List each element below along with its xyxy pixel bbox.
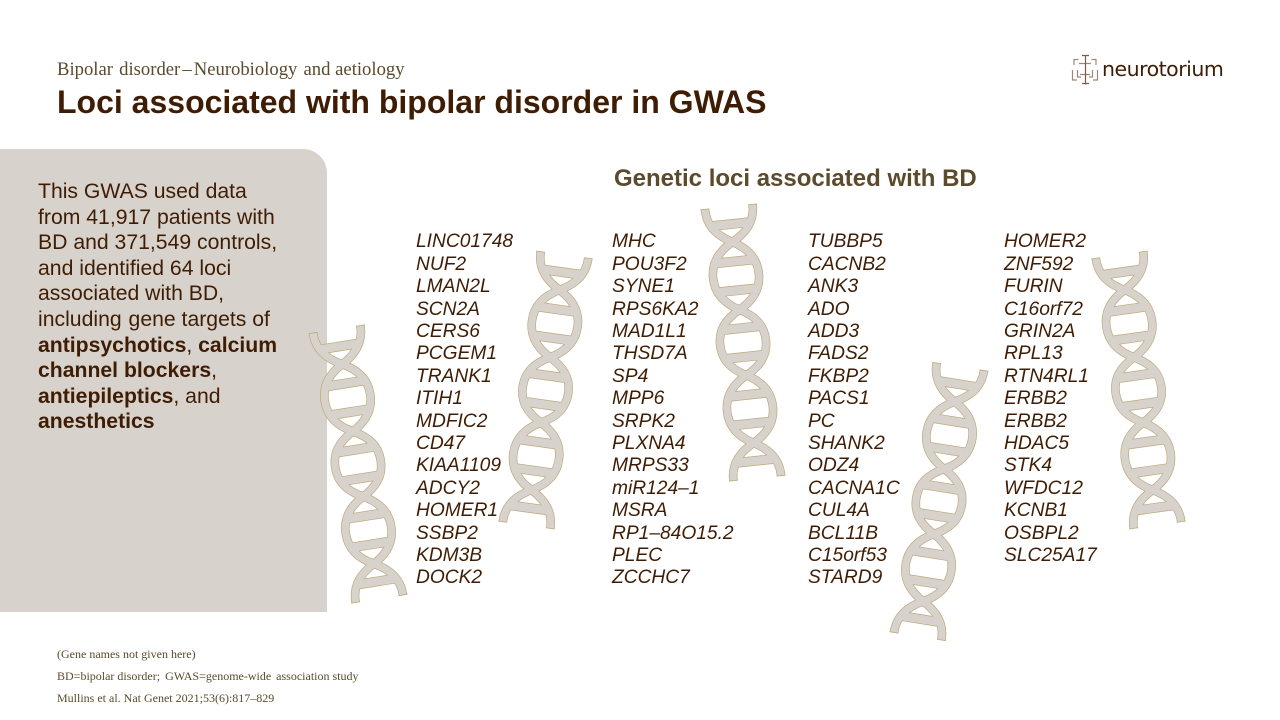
gene list column 2: MRPS33 [612,455,689,476]
gene list column 4: SLC25A17 [1004,545,1097,566]
gene list column 2: MSRA [612,500,667,521]
gene list column 3: CUL4A [808,500,870,521]
gene list column 2: SYNE1 [612,276,675,297]
gene list column 1: LINC01748 [416,231,513,252]
gene list column 3: SHANK2 [808,433,885,454]
gene list column 1: KIAA1109 [416,455,501,476]
footnotes [57,647,359,705]
gene list column 3: PC [808,411,835,432]
gene list column 1: ITIH1 [416,388,463,409]
gene list column 2: RPS6KA2 [612,299,698,320]
gene list column 1: ADCY2 [416,478,480,499]
gene list column 3: CACNA1C [808,478,900,499]
text block: study summary: antiepileptics, and [38,385,221,408]
icon: neurotorium logo mark [1072,54,1098,84]
gene list column 4: RTN4RL1 [1004,366,1089,387]
gene list column 3: BCL11B [808,523,878,544]
gene list column 1: SCN2A [416,299,480,320]
gene list column 4: GRIN2A [1004,321,1075,342]
gene list column 3 [807,231,900,588]
gene list column 3: ANK3 [808,276,858,297]
gene list column 2 [612,231,734,588]
gene list column 4: OSBPL2 [1004,523,1079,544]
footnotes: Mullins et al. Nat Genet 2021;53(6):817–829 [57,691,274,705]
gene list column 3: ADO [808,299,850,320]
footnotes: BD=bipolar disorder; GWAS=genome-wide association study [57,669,359,683]
gene list column 1: HOMER1 [416,500,498,521]
gene list column 4: ERBB2 [1004,411,1067,432]
gene list column 3: FADS2 [808,343,868,364]
gene list column 1: LMAN2L [416,276,491,297]
logo wordmark: neurotorium [1102,57,1223,81]
gene list column 1: NUF2 [416,254,466,275]
gene list column 3: PACS1 [808,388,870,409]
gene list column 2: MHC [612,231,656,252]
gene list column 4: C16orf72 [1004,299,1083,320]
icon: DNA helix 2 [498,251,593,529]
gene list column 4: ERBB2 [1004,388,1067,409]
gene list column 2: PLXNA4 [612,433,686,454]
gene list column 2: PLEC [612,545,662,566]
gene list column 3: STARD9 [808,567,882,588]
icon: DNA helix 5 [1091,251,1186,529]
gene list column 3: FKBP2 [808,366,869,387]
gene list column 2: SP4 [612,366,648,387]
gene list column 4: STK4 [1004,455,1052,476]
panel: study summary background [0,149,327,612]
text block: study summary: This GWAS used data [38,180,247,203]
gene list column 2: MPP6 [612,388,664,409]
gene list column 1: KDM3B [416,545,482,566]
text block: study summary: associated with BD, [38,282,224,305]
text block: study summary: channel blockers, [38,359,217,382]
icon: DNA helix 4 [890,363,988,640]
text block: study summary: anesthetics [38,410,155,433]
section label: Bipolar disorder – Neurobiology and aetiology [57,59,405,80]
gene list column 3: ODZ4 [808,455,859,476]
gene list column 4: KCNB1 [1004,500,1068,521]
footnotes: (Gene names not given here) [57,647,196,661]
text block: study summary: BD and 371,549 controls, [38,231,277,254]
gene list column 1: SSBP2 [416,523,478,544]
icon: DNA helix 1 [309,325,407,603]
gene list column 2: MAD1L1 [612,321,687,342]
text block: study summary: from 41,917 patients with [38,206,275,229]
gene list column 4: HDAC5 [1004,433,1069,454]
gene list column 2: SRPK2 [612,411,675,432]
gene list column 1: CERS6 [416,321,480,342]
gene list column 2: THSD7A [612,343,688,364]
gene list column 4: RPL13 [1004,343,1063,364]
gene list column 1: DOCK2 [416,567,482,588]
gene list column 3: ADD3 [808,321,859,342]
gene list column 4: HOMER2 [1004,231,1086,252]
gene list column 4: FURIN [1004,276,1063,297]
gene list column 2: POU3F2 [612,254,687,275]
gene list column 2: ZCCHC7 [612,567,690,588]
gene list column 3: C15orf53 [808,545,887,566]
gene list column 3: TUBBP5 [808,231,883,252]
gene list column 4 [1004,231,1098,566]
text block: study summary [38,180,277,433]
gene list column 1 [415,231,513,588]
gene list column 2: RP1–84O15.2 [612,523,734,544]
gene list column 4: ZNF592 [1004,254,1073,275]
gene list column 4: WFDC12 [1004,478,1083,499]
gene list column 2: miR124–1 [612,478,699,499]
chart heading: Genetic loci associated with BD [614,165,977,192]
gene list column 3: CACNB2 [808,254,886,275]
icon: DNA helix 3 [700,204,786,481]
text block: study summary: and identified 64 loci [38,257,231,280]
gene list column 1: CD47 [416,433,465,454]
gene list column 1: MDFIC2 [416,411,487,432]
gene list column 1: TRANK1 [416,366,492,387]
text block: study summary: including gene targets of [38,308,270,331]
gene list column 1: PCGEM1 [416,343,497,364]
title: Loci associated with bipolar disorder in GWAS [57,84,766,120]
text block: study summary: antipsychotics, calcium [38,334,277,357]
